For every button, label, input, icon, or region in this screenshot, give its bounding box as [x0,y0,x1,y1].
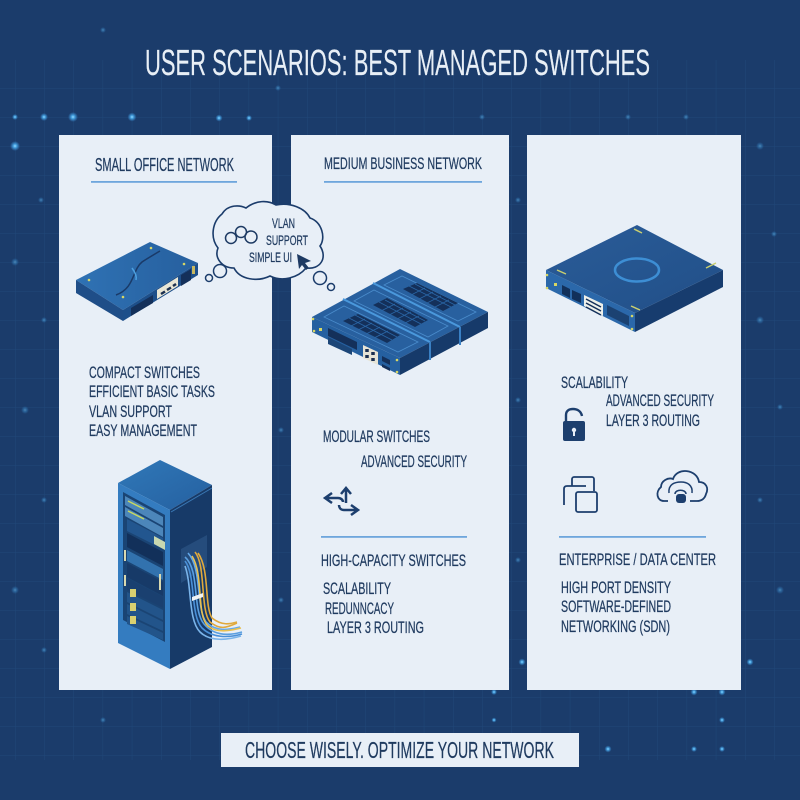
feature list: high-capacity [323,580,424,637]
cables [185,552,242,639]
feature list: high-capacity: SCALABILITY [323,580,391,598]
feature text: modular: MODULAR SWITCHES [323,428,430,446]
feature list: enterprise: SOFTWARE-DEFINED [561,598,671,616]
feature list: high-capacity: LAYER 3 ROUTING [327,619,424,637]
icon: linked rings [226,226,257,244]
footer banner [221,733,579,767]
heading underline [91,181,237,183]
icon: padlock [563,409,585,441]
feature list: enterprise: NETWORKING (SDN) [561,618,670,636]
icon: enterprise switch [546,225,723,332]
feature list: small office: EFFICIENT BASIC TASKS [89,383,215,401]
panel background [291,135,509,690]
feature list: small office: EASY MANAGEMENT [89,422,197,440]
feature list: enterprise: HIGH PORT DENSITY [561,579,671,597]
panel: medium business network [291,135,509,690]
heading: enterprise / data center: ENTERPRISE / DATA CENTER [559,550,716,569]
panel: small office network [59,135,272,690]
icon: compact switch [76,242,198,321]
feature list: small office [89,364,215,440]
feature list: high-capacity: REDUNNCACY [325,600,394,618]
heading: small office: SMALL OFFICE NETWORK [95,155,234,175]
thought bubble: VLAN [272,215,295,231]
feature text: modular [323,428,467,471]
icon: overlapping windows [564,477,597,512]
icon: server rack [118,460,242,669]
feature text: scalability: LAYER 3 ROUTING [606,412,700,430]
panel background [527,135,741,690]
section divider [559,536,706,538]
feature text: scalability: SCALABILITY [561,374,628,392]
feature list: enterprise [561,579,671,636]
icon: modular switch [312,269,488,375]
feature text: modular: ADVANCED SECURITY [361,453,467,471]
panel: enterprise data center [527,135,741,690]
heading: medium business: MEDIUM BUSINESS NETWORK [324,154,482,173]
heading: high-capacity switches: HIGH-CAPACITY SWITCHES [321,551,466,570]
icon: routing arrows [325,488,358,515]
footer banner: CHOOSE WISELY. OPTIMIZE YOUR NETWORK [245,737,554,763]
icon: cloud lock [657,471,707,503]
feature text: scalability [561,374,714,430]
section divider [321,536,467,538]
icon: cursor [297,254,311,270]
panel background [59,135,272,690]
feature text: scalability: ADVANCED SECURITY [606,392,714,410]
feature list: small office: VLAN SUPPORT [89,403,172,421]
thought bubble [206,202,334,290]
feature list: small office: COMPACT SWITCHES [89,364,200,382]
heading underline [324,181,482,183]
thought bubble: SUPPORT [266,232,308,248]
thought bubble: SIMPLE UI [249,249,292,265]
